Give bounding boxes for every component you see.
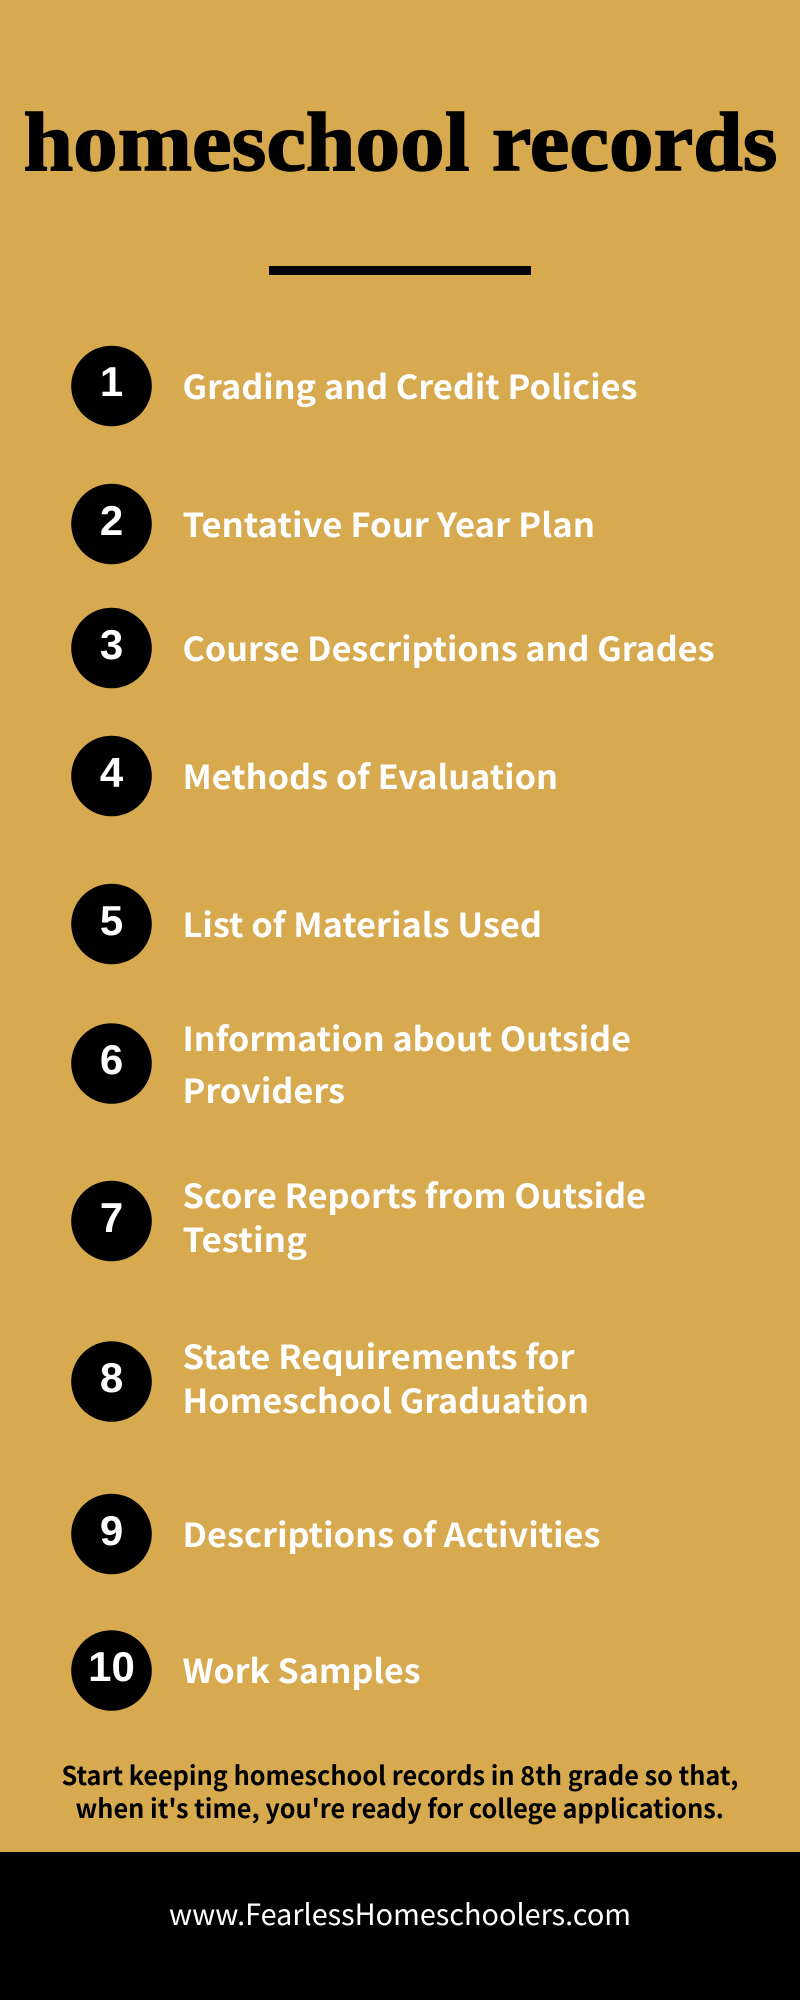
number badge 2: 2 — [100, 497, 123, 544]
number badge 1 — [71, 346, 152, 426]
list item 6 — [71, 1013, 631, 1113]
list item 10 — [71, 1630, 420, 1711]
number badge 5: 5 — [100, 897, 123, 944]
label: information about outside providers: Information about Outside — [182, 1013, 631, 1061]
label: list of materials used: List of Materials Used — [182, 899, 542, 947]
label: grading and credit policies: Grading and Credit Policies — [182, 361, 638, 409]
label: course descriptions and grades: Course Descriptions and Grades — [182, 623, 714, 671]
number badge 3 — [71, 608, 152, 688]
label: information about outside providers: Providers — [182, 1065, 345, 1113]
label: score reports from outside testing: Testing — [182, 1214, 307, 1262]
number badge 6 — [71, 1023, 152, 1104]
number badge 1: 1 — [100, 358, 123, 405]
title underline bar — [269, 266, 531, 275]
footer website address: www.FearlessHomeschoolers.com — [169, 1892, 631, 1934]
closing note: when it's time, you're ready for college applications. — [76, 1789, 724, 1826]
number badge 7: 7 — [100, 1194, 123, 1241]
number badge 8 — [71, 1341, 152, 1422]
closing note: Start keeping homeschool records in 8th grade so that, — [62, 1756, 738, 1793]
label: descriptions of activities: Descriptions of Activities — [182, 1509, 600, 1557]
number badge 10 — [71, 1630, 152, 1711]
list item 7 — [71, 1170, 646, 1262]
label: work samples: Work Samples — [182, 1645, 420, 1693]
number badge 3: 3 — [100, 621, 123, 668]
number badge 8: 8 — [100, 1354, 123, 1401]
label: state requirements for homeschool graduation — [182, 1331, 589, 1423]
list item 9 — [71, 1494, 600, 1574]
number badge 5 — [71, 884, 152, 964]
closing note — [62, 1756, 738, 1826]
list item 1 — [71, 346, 637, 426]
list item 8 — [71, 1331, 589, 1423]
title: homeschool records — [24, 96, 778, 189]
list item 3 — [71, 608, 714, 688]
list item 2 — [71, 484, 595, 564]
label: information about outside providers — [182, 1013, 631, 1113]
label: state requirements for homeschool graduation: Homeschool Graduation — [182, 1375, 589, 1423]
number badge 6: 6 — [100, 1036, 123, 1083]
number badge 10: 10 — [88, 1643, 135, 1690]
label: score reports from outside testing — [182, 1170, 646, 1262]
list item 4 — [71, 736, 558, 816]
number badge 4: 4 — [100, 749, 124, 796]
number badge 9 — [71, 1494, 152, 1574]
list item 5 — [71, 884, 542, 964]
number badge 2 — [71, 484, 152, 564]
label: state requirements for homeschool graduation: State Requirements for — [182, 1331, 575, 1379]
label: score reports from outside testing: Score Reports from Outside — [182, 1170, 646, 1218]
label: tentative four year plan: Tentative Four Year Plan — [182, 499, 595, 547]
label: methods of evaluation: Methods of Evaluation — [182, 751, 558, 799]
number badge 7 — [71, 1181, 152, 1261]
number badge 4 — [71, 736, 152, 816]
footer band — [0, 1852, 800, 2000]
number badge 9: 9 — [100, 1507, 123, 1554]
